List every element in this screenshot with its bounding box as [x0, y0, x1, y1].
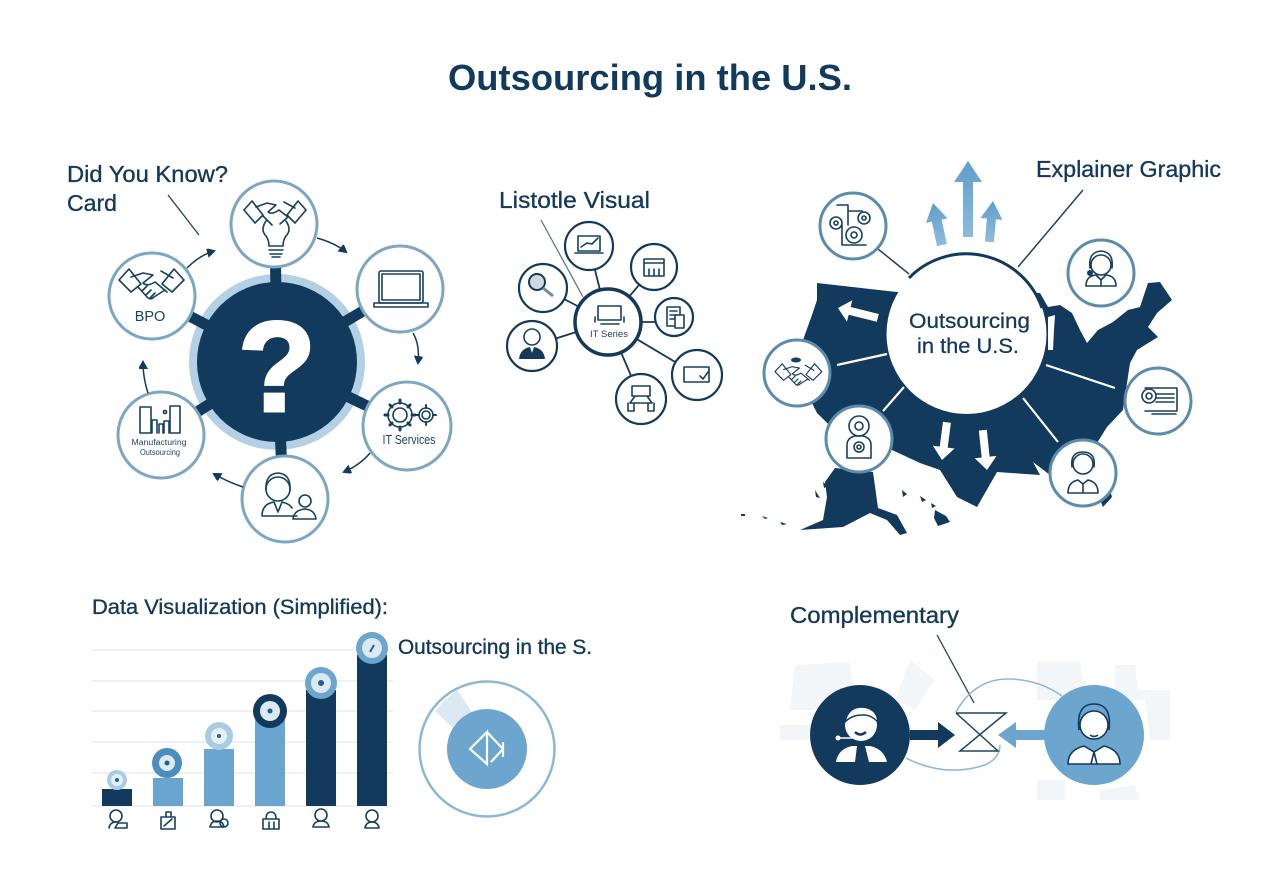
arrow: laptop to IT services — [413, 333, 418, 363]
hub: IT series — [575, 289, 641, 355]
white arrow south two — [972, 429, 998, 471]
icon: headset agent upper right — [1068, 240, 1134, 306]
connecting arcs — [906, 679, 1062, 770]
panel: listotle visual — [499, 187, 722, 424]
icon: manufacturing outsourcing — [118, 392, 204, 478]
icon: BPO handshake — [109, 253, 195, 339]
icon: handshake — [764, 340, 830, 406]
connector lines — [532, 246, 697, 399]
icon: BPO handshake: BPO — [135, 309, 165, 325]
heading: card: Card — [67, 190, 117, 216]
arrow: right — [910, 722, 955, 748]
white arrow west — [835, 297, 880, 329]
arrow: agents to manufacturing — [214, 474, 243, 487]
central circle with label: Outsourcing — [909, 309, 1030, 333]
title: Outsourcing in the U.S. — [448, 57, 852, 98]
hub: IT series: IT Series — [590, 329, 629, 339]
heading: complementary: Complementary — [790, 602, 960, 628]
node: agent — [507, 321, 557, 371]
leader line — [541, 220, 583, 297]
lake cut-out — [1048, 315, 1055, 350]
central circle with label — [886, 254, 1046, 414]
arrow: cycle top to laptop — [317, 238, 346, 252]
blue arrows upward — [922, 161, 1004, 247]
arrow: manufacturing to BPO — [143, 362, 148, 393]
node: magnifier — [519, 264, 567, 312]
agent circle: dark — [810, 685, 910, 785]
heading: data visualization: Data Visualization (Simplified): — [92, 596, 388, 619]
arrow: left — [998, 722, 1045, 748]
central question circle — [157, 230, 402, 495]
connector lines on map — [837, 354, 1115, 442]
icon: manufacturing outsourcing: Manufacturing — [132, 438, 186, 447]
icon: headset agent lower right — [1050, 440, 1116, 506]
icon: idea handshake — [231, 181, 317, 267]
icon: manufacturing outsourcing: Outsourcing — [140, 448, 180, 457]
axis icons — [109, 809, 379, 829]
node: checklist board — [672, 350, 722, 400]
heading: did you know: Did You Know? — [67, 161, 228, 187]
node: chart on laptop — [565, 222, 613, 270]
panel: explainer graphic — [741, 156, 1221, 535]
heading: listotle visual: Listotle Visual — [499, 187, 650, 213]
agent circle: blue — [1044, 685, 1144, 785]
icon: laptop — [357, 246, 443, 332]
map: continental USA and Alaska — [741, 282, 1172, 535]
hourglass exchange symbol — [956, 713, 1006, 751]
node: browser window — [631, 244, 677, 290]
icon: IT services — [363, 382, 451, 470]
node: network screen — [616, 374, 666, 424]
icon: IT services: IT Services — [382, 432, 436, 447]
icon: exchange glyph — [470, 732, 503, 764]
bar markers — [107, 632, 388, 790]
heading: outsourcing in the S.: Outsourcing in the S. — [398, 636, 592, 659]
icon: magnifier and list screen — [1125, 368, 1191, 434]
white arrow south one — [931, 421, 958, 461]
icon: call-centre agents — [242, 456, 328, 542]
panel: data visualization — [92, 596, 592, 829]
grid lines — [92, 650, 393, 806]
panel: did you know card — [67, 161, 451, 542]
background map shapes — [780, 660, 1170, 800]
bar chart — [102, 655, 387, 806]
central question circle: ? — [238, 296, 316, 439]
donut chart — [420, 682, 554, 816]
central circle with label: in the U.S. — [917, 334, 1019, 358]
leader line — [937, 635, 974, 703]
arrow: BPO to top — [187, 251, 214, 268]
icon: target person — [826, 406, 892, 472]
leader line — [168, 195, 199, 235]
arrow: IT services to agents — [344, 453, 370, 472]
icon: machinery — [820, 193, 886, 259]
node: document — [655, 298, 693, 336]
connector lines off map — [878, 190, 1083, 274]
heading: explainer graphic: Explainer Graphic — [1036, 156, 1221, 182]
panel: complementary — [780, 602, 1170, 800]
